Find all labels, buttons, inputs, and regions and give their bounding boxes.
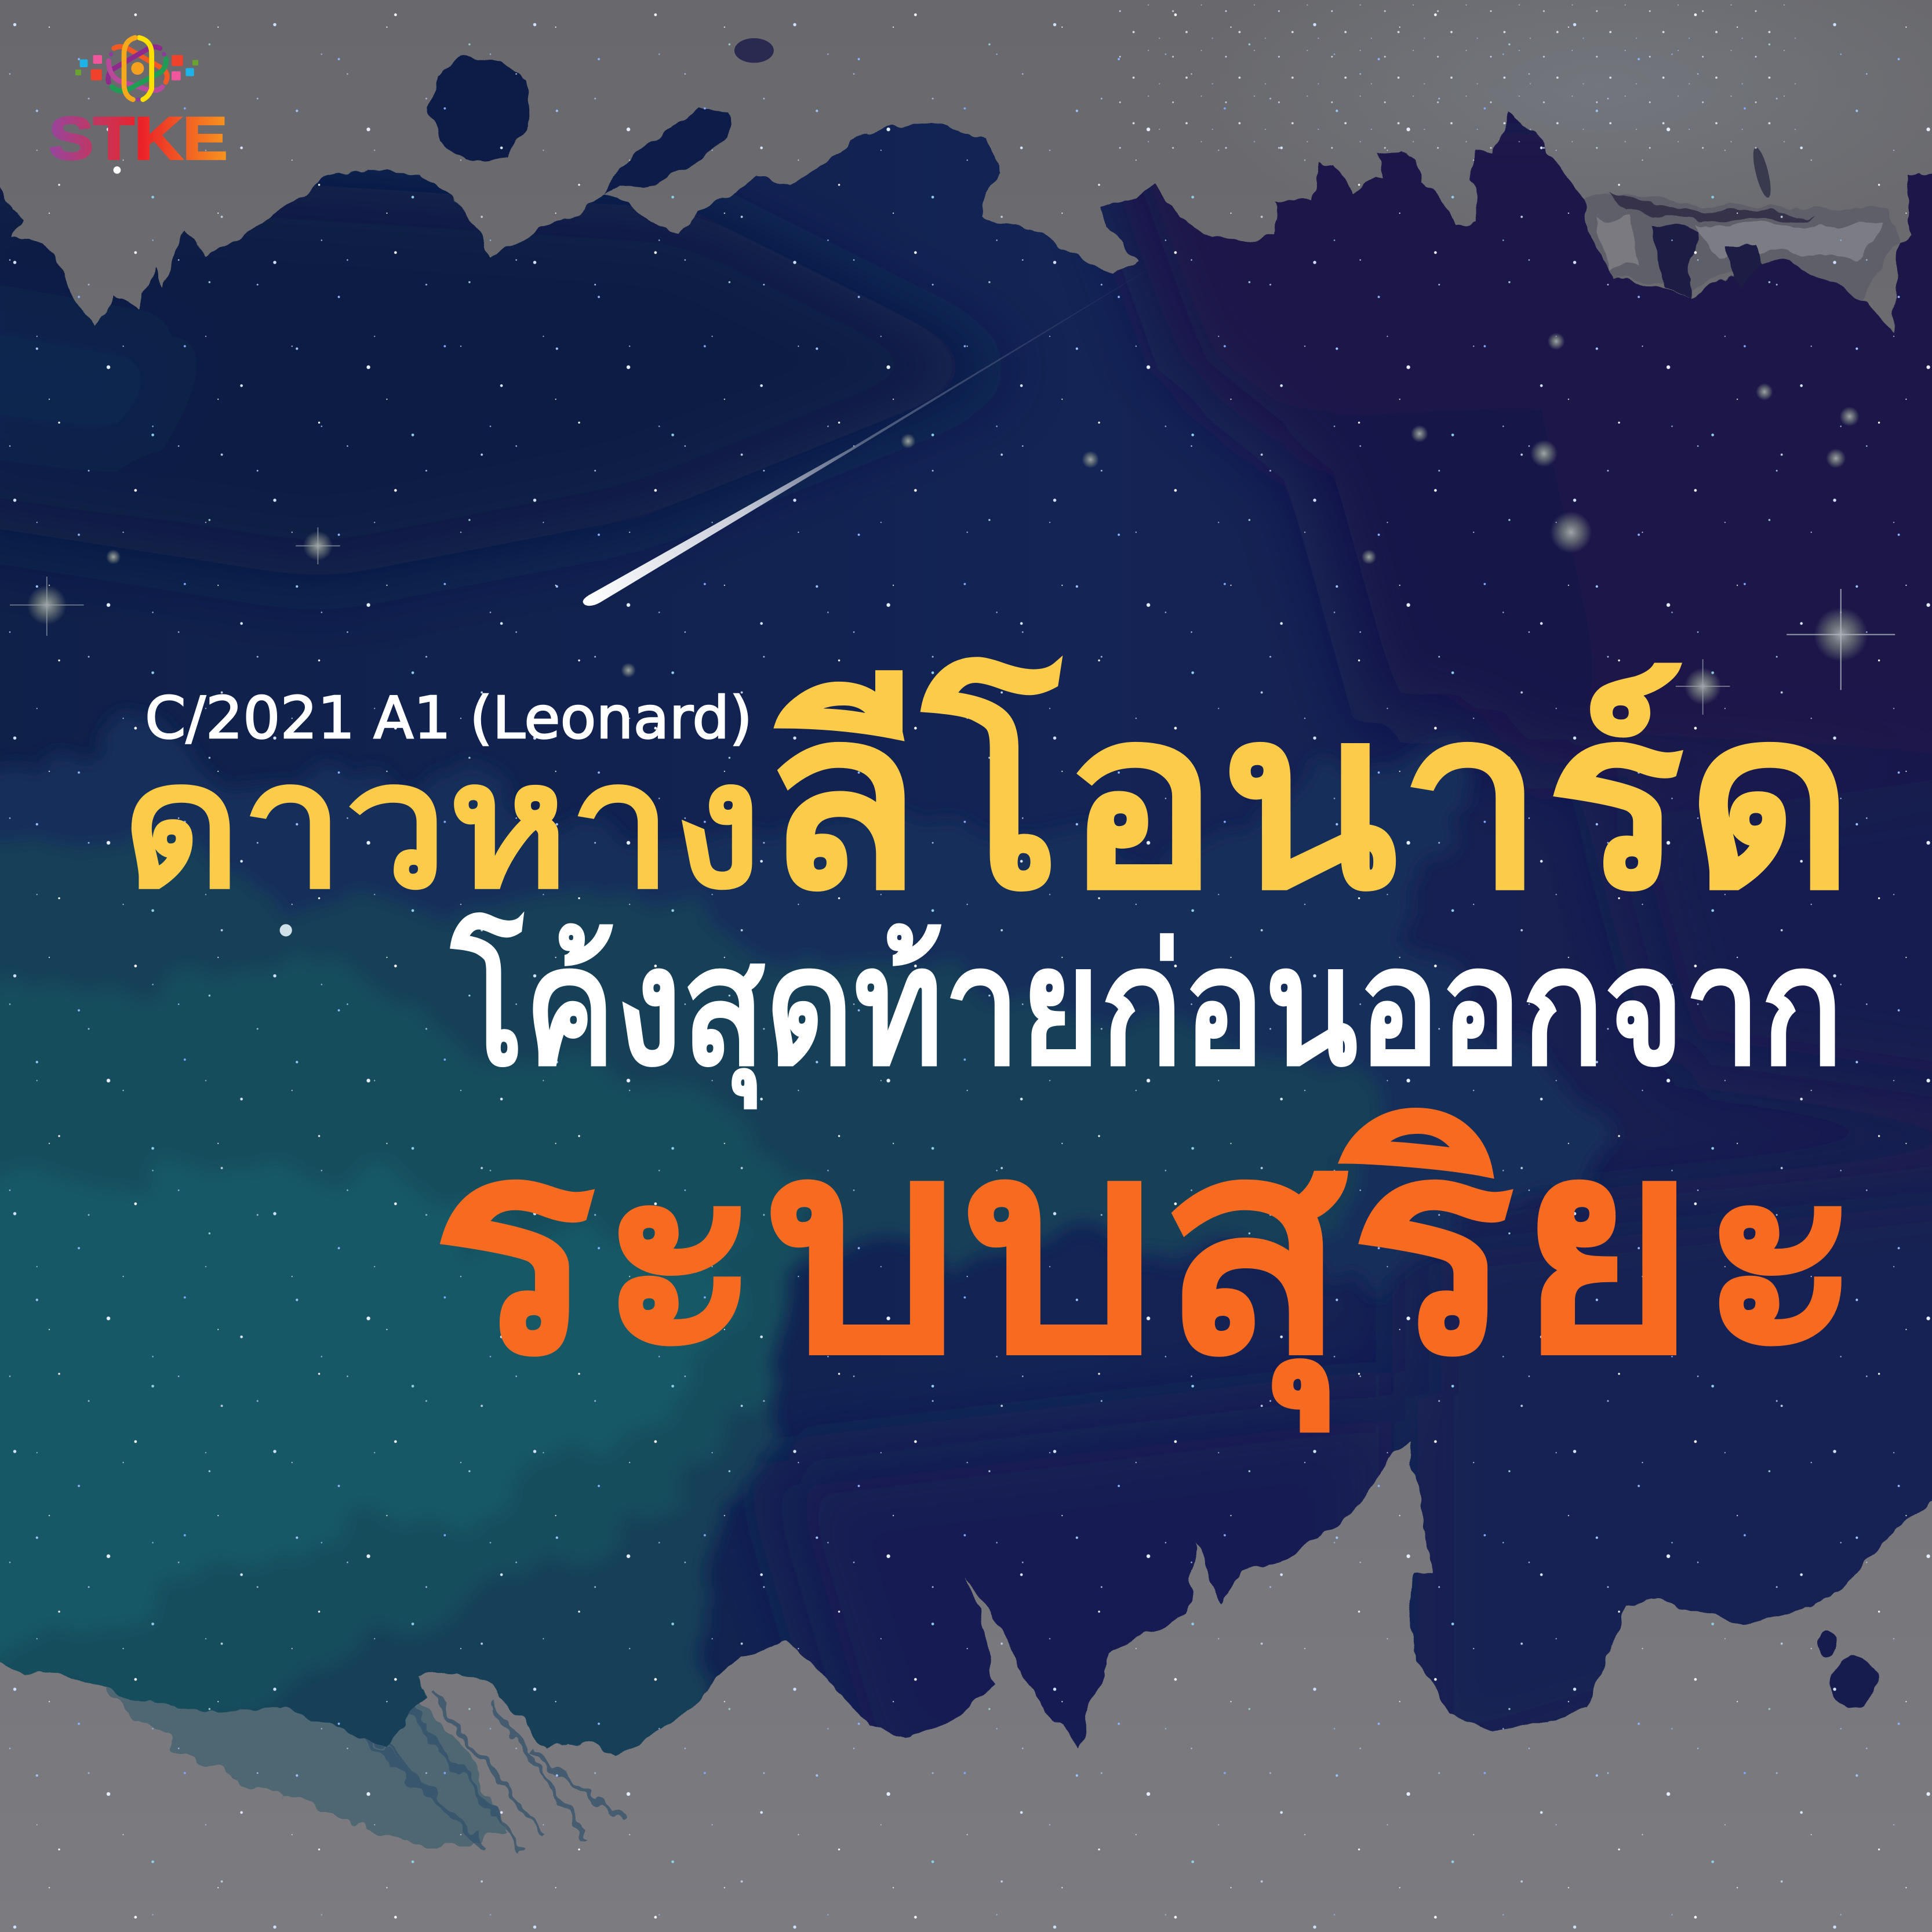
title line 3: orange: ระบบสุริยะ [430,1082,1865,1434]
milky way haze top right [1195,0,1932,246]
subtitle: comet designation: C/2021 A1 (Leonard) [145,684,752,752]
logo pixel squares [75,55,198,81]
shooting star comet [583,271,1146,606]
semi transparent dry brush, bottom left [0,1651,622,1848]
title line 1: large yellow: ลีโอนาร์ด [762,652,1855,940]
logo wordmark: STKE [49,105,227,172]
ink drop: large round splat [428,57,531,163]
logo atom icon [108,38,167,101]
ink drop: small oval [734,38,774,63]
ink brush smear top right [1585,192,1899,300]
ink drops: bottom right [1817,1634,1878,1707]
ink drop: top right streak [1750,146,1774,199]
title line 1: small yellow: ดาวหาง [122,726,762,924]
bokeh and bright stars [10,166,1895,936]
ink drop: diagonal splat [604,107,727,197]
